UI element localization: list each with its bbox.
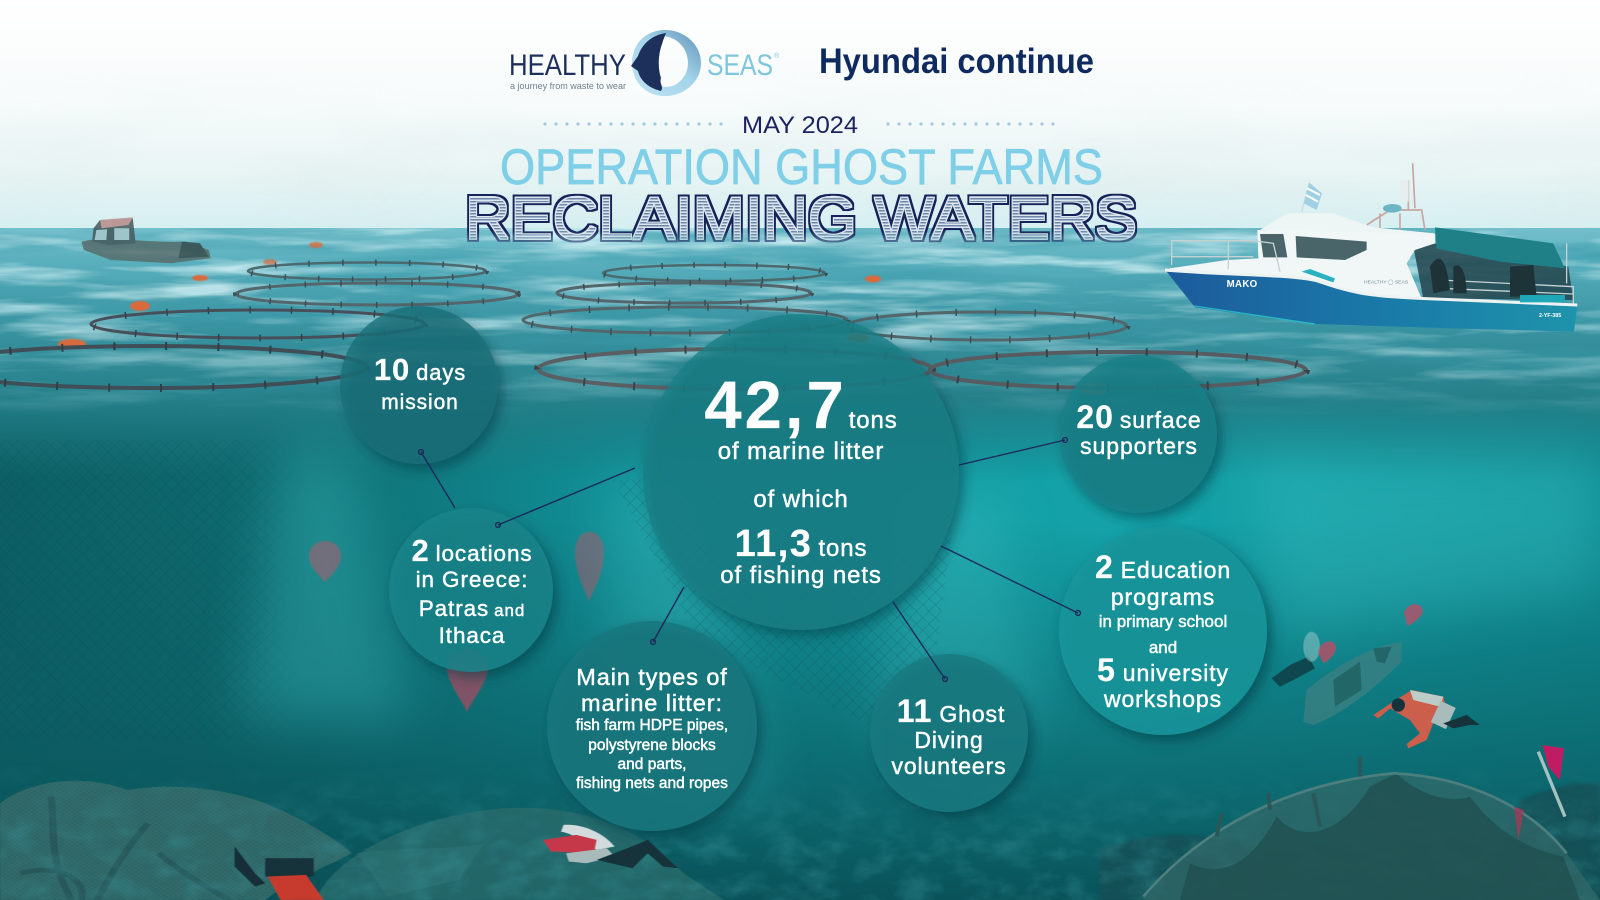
ring 9 (847, 312, 1127, 340)
crew and gear (1430, 259, 1537, 297)
stat circle: main (643, 314, 959, 630)
stat circle: 10 days mission: mission (381, 391, 459, 414)
fish farm rings (0, 262, 1306, 389)
seabed: right background (1100, 783, 1600, 900)
background: sea surface (0, 228, 1600, 488)
background: sky (0, 0, 1600, 232)
connector end dots (419, 438, 1080, 681)
stat circle: 11 Ghost Diving volunteers: Diving (914, 727, 984, 753)
ring 4 (0, 346, 367, 388)
ring 5 (603, 265, 825, 281)
stat circle: 2 locations: Ithaca (439, 623, 505, 648)
stat circle: main types of marine litter: marine litter: (581, 690, 723, 716)
diver: bottom left (235, 847, 324, 900)
logo: Healthy Seas (509, 30, 780, 96)
cabin accent (1302, 269, 1335, 282)
stat circle: main types of marine litter: polystyrene blocks (588, 737, 716, 754)
logo tagline: a journey from waste to wear (510, 81, 626, 91)
logo: Hyundai continue: Hyundai continue (819, 42, 1094, 81)
stat circle: education (1059, 527, 1267, 735)
canopy (1435, 227, 1565, 268)
work barge (81, 217, 211, 263)
stat circle: main: 11,3tons (735, 523, 867, 565)
date: MAY 2024 (742, 112, 858, 139)
stat circle: main types of marine litter (547, 621, 757, 831)
background: clouds (0, 60, 1600, 232)
ring 10 (930, 352, 1306, 388)
fish farm cage: bottom right (1143, 745, 1600, 900)
stat circle: 2 locations: Patras and (419, 596, 525, 621)
stat circle: 20 surface supporters (1059, 355, 1217, 513)
logo wordmark: SEAS: SEAS (707, 49, 773, 82)
windows (1260, 234, 1367, 260)
boat: MAKO (1165, 163, 1577, 332)
connector: main to litter types (653, 587, 684, 642)
stat circle: main types of marine litter: and parts, (618, 756, 686, 773)
diver: bottom centre (543, 825, 678, 868)
stat circle: main types of marine litter: fishing nets and ropes (576, 775, 728, 792)
ring 1 (248, 262, 486, 280)
stat circle: education: and (1149, 638, 1177, 657)
diver: right (1373, 690, 1480, 748)
fish farm net curtain: centre (612, 470, 960, 730)
deck edge (1165, 270, 1577, 305)
stat circle: education: workshops (1103, 686, 1222, 712)
stat circle: education: 2 Education (1095, 549, 1231, 585)
logo dolphin (631, 33, 666, 91)
title: Reclaiming Waters: RECLAIMING WATERS (465, 185, 1137, 252)
boat name: MAKO (1227, 279, 1258, 290)
registered mark: ® (774, 52, 780, 60)
ring 3 (91, 310, 425, 338)
flag (1302, 183, 1322, 212)
stat circle: main types of marine litter: Main types of (576, 664, 728, 690)
connector: main to supporters (959, 440, 1065, 465)
background: surface wave shadows (0, 228, 1600, 372)
seabed: centre mound (316, 808, 724, 900)
stat circle: 20 surface supporters: 20 surface (1076, 399, 1202, 435)
ring 7 (523, 307, 847, 333)
stat circle: 11 Ghost Diving volunteers: volunteers (891, 753, 1007, 779)
seabed: left net heap (0, 781, 352, 900)
stat circle: 2 locations (389, 508, 553, 672)
surface buoys (58, 242, 1109, 395)
cabin and deck (1167, 230, 1435, 298)
stat circle: main types of marine litter: fish farm HDPE pipes, (576, 717, 728, 734)
railings (1172, 241, 1573, 303)
hull (1167, 272, 1577, 332)
hull stripe (1194, 306, 1315, 324)
stat circle: 20 surface supporters: supporters (1080, 433, 1198, 459)
stat circle: main: 42,7tons (704, 368, 898, 443)
stat circle: main: of fishing nets (720, 562, 882, 589)
seabed texture (0, 804, 1600, 900)
light rays (240, 450, 1600, 800)
date divider: left (545, 122, 722, 126)
cargo (1520, 295, 1565, 302)
date divider: right (888, 122, 1062, 126)
hull logo: HEALTHY ◯ SEAS (1364, 279, 1409, 285)
stern cockpit (1413, 243, 1573, 300)
ring 8 (538, 349, 932, 389)
buoy: underwater locations (447, 649, 488, 712)
stat circle: 10 days mission: 10 days (374, 352, 466, 387)
stat circle: 11 Ghost Diving volunteers: 11 Ghost (897, 693, 1005, 729)
sunken boat (1303, 642, 1402, 725)
buoy: underwater centre (575, 532, 604, 602)
stat circle: education: 5 university (1097, 652, 1229, 688)
logo ring (632, 30, 701, 96)
stat circle: 11 Ghost Diving volunteers (870, 654, 1028, 812)
connector: main to volunteers (893, 602, 945, 679)
stat circle: education: programs (1111, 584, 1215, 610)
radome (1383, 180, 1409, 213)
ring 2 (236, 283, 518, 305)
mast and antenna (1367, 163, 1425, 230)
connector: locations to main (498, 468, 635, 525)
cabin roof (1260, 213, 1435, 240)
connector lines (419, 438, 1080, 681)
title: Operation Ghost Farms: OPERATION GHOST FARMS (500, 139, 1103, 195)
background diver and buoy (1272, 604, 1423, 687)
stat circle: 10 days mission (340, 306, 498, 464)
connector: 10 days to locations (421, 452, 455, 508)
logo wordmark: HEALTHY: HEALTHY (509, 49, 626, 82)
connector: main to education (941, 546, 1078, 613)
ring 6 (557, 283, 811, 303)
boat registration: 2-YF-385 (1539, 313, 1561, 319)
buoy: underwater left (309, 541, 341, 582)
background: surface waves (0, 228, 1600, 418)
stat circle: education: in primary school (1099, 612, 1227, 631)
stat circle: main: of marine litter (718, 438, 884, 465)
background: underwater (0, 400, 1600, 900)
background: depth shading (0, 520, 1600, 900)
stat circle: 2 locations: in Greece: (416, 567, 528, 592)
stat circle: 2 locations: 2 locations (411, 533, 533, 568)
fish farm net curtain: left (0, 440, 266, 732)
stat circle: main: of which (753, 486, 849, 513)
